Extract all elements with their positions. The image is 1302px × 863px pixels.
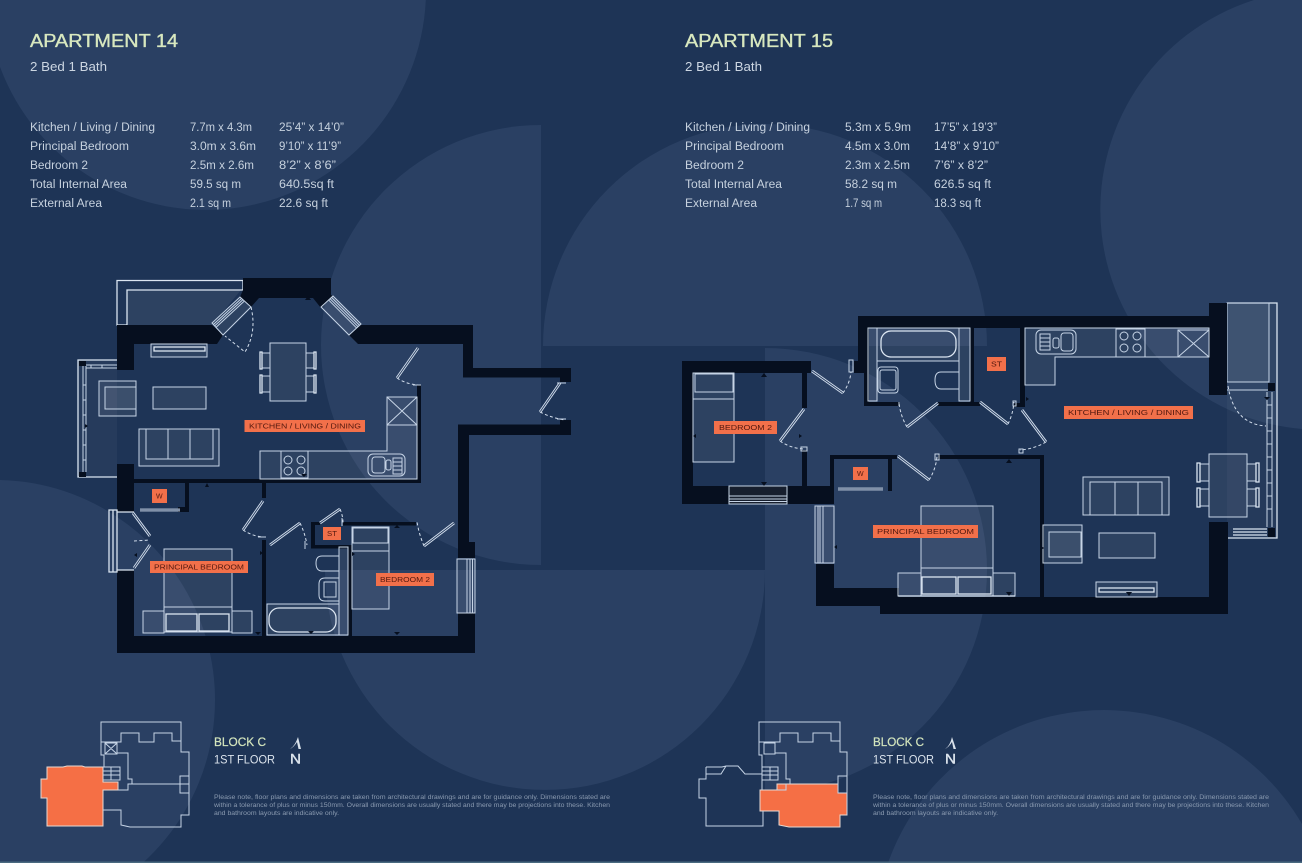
windows: apartment 14 — [109, 296, 475, 613]
panel: apartment 15 specification — [685, 31, 999, 210]
subtitle: apartment 15: 2 Bed 1 Bath — [685, 59, 762, 74]
table: apartment 15 room dimensions: Kitchen / Living / Dining — [685, 122, 810, 134]
windows: apartment 15 — [729, 486, 834, 563]
table: apartment 14 room dimensions: Total Internal Area — [30, 179, 128, 191]
table: apartment 14 room dimensions: Kitchen / Living / Dining — [30, 122, 155, 134]
doors: apartment 15 — [780, 360, 1046, 489]
disclaimer: apartment 14: within a tolerance of plus or minus 150mm. Overall dimensions are usually stated and there may be projections into these. Kitchen — [213, 802, 611, 809]
label: st: ST — [991, 362, 1003, 368]
table: apartment 15 room dimensions: 2.3m x 2.5m — [845, 160, 910, 172]
furniture: bathroom — [267, 547, 348, 635]
label: principal bedroom: PRINCIPAL BEDROOM — [154, 564, 244, 572]
disclaimer: apartment 14 — [213, 794, 611, 817]
label: principal bedroom — [150, 561, 248, 573]
block and floor caption: apartment 14: BLOCK C — [214, 735, 266, 749]
dining table with chairs — [1197, 454, 1259, 517]
label: st — [323, 527, 341, 540]
walls: apartment 14 — [117, 278, 571, 653]
label: kitchen living dining — [244, 420, 365, 432]
disclaimer: apartment 14: and bathroom layouts are indicative only. — [214, 810, 339, 817]
furniture: apartment 15 living area — [1043, 454, 1259, 597]
coffee table — [1099, 533, 1155, 558]
label: w: W — [857, 471, 864, 478]
kitchen counter — [1025, 328, 1209, 385]
label: w — [853, 467, 868, 480]
sofa — [139, 429, 219, 466]
table: apartment 15 room dimensions — [685, 122, 999, 210]
balcony: right terrace — [1227, 303, 1277, 538]
block and floor caption: apartment 15: BLOCK C — [873, 735, 924, 749]
subtitle: apartment 14: 2 Bed 1 Bath — [30, 59, 107, 74]
balcony: left terrace — [78, 360, 117, 477]
north arrow: apartment 14 — [290, 737, 301, 766]
label: bedroom 2 — [376, 573, 434, 586]
kitchen hob — [1116, 329, 1145, 357]
label: w: W — [156, 494, 163, 500]
furniture: apartment 15 principal bedroom bed — [898, 506, 1015, 596]
disclaimer: apartment 15: Please note, floor plans and dimensions are taken from architectural drawings and are for guidance only. Dimensions stated are — [873, 794, 1270, 801]
block and floor caption: apartment 14: 1ST FLOOR — [214, 752, 275, 766]
label: st — [987, 357, 1006, 371]
furniture: apartment 15 bathroom — [868, 328, 970, 401]
table: apartment 15 room dimensions: 17’5” x 19’3” — [934, 122, 997, 134]
table: apartment 15 room dimensions: 18.3 sq ft — [934, 198, 982, 210]
table: apartment 15 room dimensions: Bedroom 2 — [685, 160, 744, 172]
label: kitchen living dining — [1064, 406, 1193, 419]
table: apartment 14 room dimensions: External Area — [30, 198, 103, 210]
disclaimer: apartment 15: within a tolerance of plus or minus 150mm. Overall dimensions are usually stated and there may be projections into these. Kitchen — [872, 802, 1270, 809]
dining table with chairs — [260, 343, 316, 401]
label: principal bedroom: PRINCIPAL BEDROOM — [877, 529, 974, 536]
furniture: apartment 15 kitchen — [1025, 328, 1209, 385]
table: apartment 14 room dimensions: 2.5m x 2.6m — [190, 160, 254, 172]
key plan: apartment 14 location — [41, 722, 189, 827]
table: apartment 15 room dimensions: Principal Bedroom — [685, 141, 784, 153]
table: apartment 14 room dimensions: 25’4” x 14’0” — [279, 122, 344, 134]
table: apartment 15 room dimensions: 7’6” x 8’2” — [934, 160, 988, 172]
table: apartment 14 room dimensions: 59.5 sq m — [190, 179, 241, 191]
table: apartment 15 room dimensions: 626.5 sq ft — [934, 179, 992, 191]
block and floor caption: apartment 15 — [873, 735, 934, 766]
furniture: apartment 15 bedroom 2 bed — [693, 373, 734, 462]
markers: apartment 15 — [693, 373, 1270, 596]
title: apartment 14: APARTMENT 14 — [30, 31, 178, 51]
table: apartment 15 room dimensions: 58.2 sq m — [845, 179, 897, 191]
coffee table — [153, 387, 206, 409]
label: bedroom 2: BEDROOM 2 — [380, 577, 430, 584]
table: apartment 15 room dimensions: External Area — [685, 198, 758, 210]
table: apartment 14 room dimensions: Bedroom 2 — [30, 160, 88, 172]
table: apartment 15 room dimensions: 1.7 sq m — [845, 198, 882, 210]
furniture: principal bedroom bed — [143, 549, 252, 633]
disclaimer: apartment 15 — [872, 794, 1270, 817]
kitchen hob — [281, 451, 308, 478]
table: apartment 15 room dimensions: 5.3m x 5.9m — [845, 122, 911, 134]
panel: apartment 14 specification — [30, 31, 344, 210]
title: apartment 15: APARTMENT 15 — [685, 31, 833, 51]
table: apartment 14 room dimensions: Principal Bedroom — [30, 141, 129, 153]
table: apartment 15 room dimensions: 14’8” x 9’10” — [934, 141, 999, 153]
table: apartment 15 room dimensions: Total Internal Area — [685, 179, 783, 191]
label: kitchen living dining: KITCHEN / LIVING / DINING — [1068, 410, 1189, 417]
label: w — [152, 489, 167, 503]
balcony: top terrace — [117, 280, 243, 325]
label: kitchen living dining: KITCHEN / LIVING / DINING — [249, 424, 361, 430]
north arrow: apartment 15: N — [945, 750, 956, 766]
kitchen sink — [1036, 330, 1076, 354]
floor plan: apartment 14 — [78, 278, 571, 653]
armchair — [99, 381, 136, 416]
label: bedroom 2 — [714, 421, 777, 434]
north arrow: apartment 15 — [945, 737, 956, 766]
floor plan: apartment 15 — [682, 303, 1277, 614]
label: bedroom 2: BEDROOM 2 — [719, 425, 772, 432]
kitchen counter — [260, 397, 417, 479]
table: apartment 14 room dimensions: 2.1 sq m — [190, 198, 231, 210]
markers: apartment 14 — [85, 296, 400, 635]
walls: apartment 15 — [682, 303, 1228, 614]
table: apartment 15 room dimensions: 4.5m x 3.0m — [845, 141, 910, 153]
furniture: apartment 14 living area — [99, 343, 417, 479]
table: apartment 14 room dimensions — [30, 122, 344, 210]
kitchen unit — [387, 397, 417, 451]
north arrow: apartment 14: N — [290, 750, 301, 766]
table: apartment 14 room dimensions: 22.6 sq ft — [279, 198, 329, 210]
table: apartment 14 room dimensions: 9’10” x 11’9” — [279, 141, 341, 153]
table: apartment 14 room dimensions: 3.0m x 3.6m — [190, 141, 256, 153]
block and floor caption: apartment 15: 1ST FLOOR — [873, 752, 934, 766]
furniture: bedroom 2 bed — [352, 527, 389, 609]
tv unit — [151, 344, 207, 357]
sofa — [1083, 477, 1169, 515]
label: principal bedroom — [873, 525, 978, 538]
table: apartment 14 room dimensions: 7.7m x 4.3m — [190, 122, 252, 134]
disclaimer: apartment 15: and bathroom layouts are indicative only. — [873, 810, 998, 817]
key plan: apartment 15 location — [699, 722, 847, 827]
table: apartment 14 room dimensions: 8’2” x 8’6” — [279, 160, 336, 172]
doors: apartment 14 — [133, 307, 566, 568]
label: st: ST — [327, 531, 338, 538]
armchair — [1043, 525, 1082, 563]
disclaimer: apartment 14: Please note, floor plans and dimensions are taken from architectural drawings and are for guidance only. Dimensions stated are — [214, 794, 611, 801]
tv unit — [1096, 582, 1157, 597]
kitchen sink — [368, 454, 405, 476]
kitchen unit — [1178, 330, 1209, 357]
block and floor caption: apartment 14 — [214, 735, 275, 766]
table: apartment 14 room dimensions: 640.5sq ft — [279, 179, 335, 191]
